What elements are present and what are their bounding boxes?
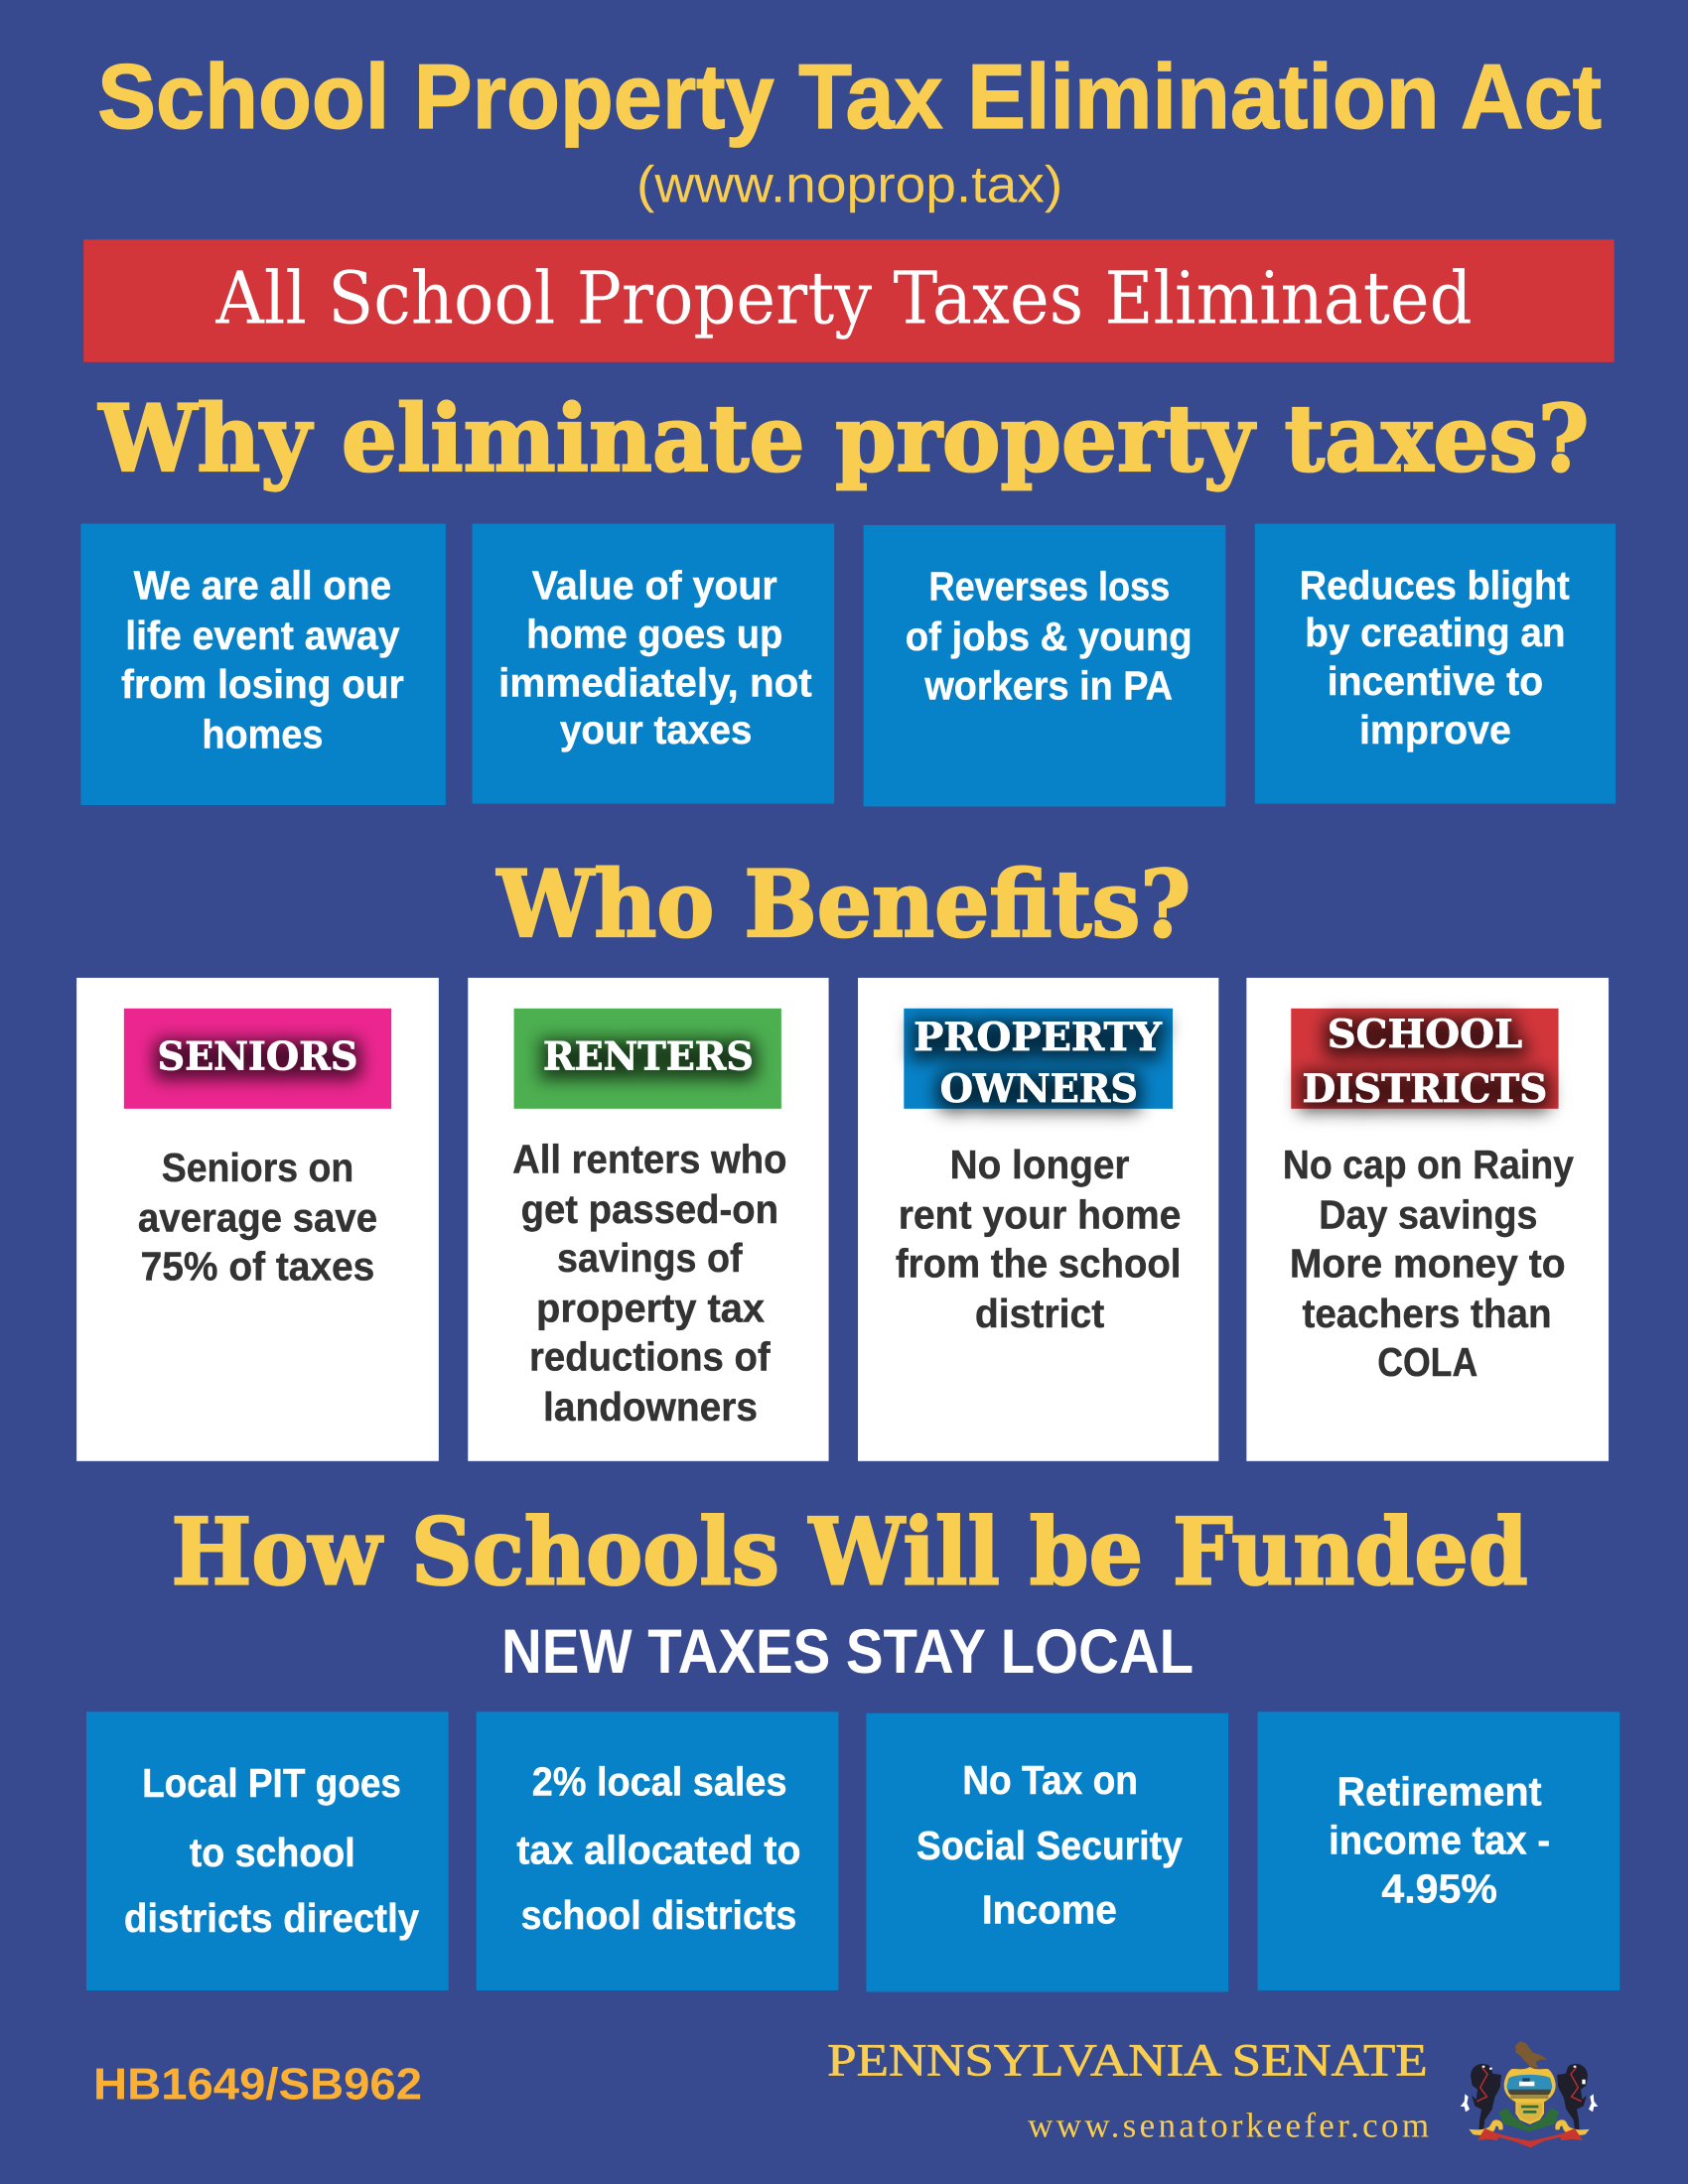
reason card 1: [80, 524, 446, 805]
text: seniors: 75% of taxes: [141, 1245, 374, 1290]
text: seniors: [138, 1147, 377, 1290]
funding card 2: tax allocated to: [516, 1829, 801, 1873]
horse white marks: [1461, 2066, 1598, 2112]
label: property owners: [904, 1009, 1173, 1112]
reason card 2: Value of your: [532, 564, 777, 609]
reason card 1: life event away: [125, 614, 400, 659]
text: renters: get passed-on: [521, 1188, 778, 1233]
reason card 1: We are all one: [134, 564, 391, 609]
heading: why eliminate: Why eliminate property taxes?: [97, 384, 1589, 493]
label: property owners: OWNERS: [940, 1065, 1138, 1112]
reason card 1: from losing our: [121, 663, 404, 708]
card: seniors: [76, 978, 439, 1461]
reason card 4: by creating an: [1305, 612, 1566, 656]
funding card 2: school districts: [521, 1894, 796, 1939]
text: school districts: Day savings: [1319, 1193, 1538, 1238]
title: School Property Tax Elimination Act: [97, 45, 1602, 148]
text: school districts: No cap on Rainy: [1283, 1144, 1574, 1188]
text: school districts: [1283, 1144, 1574, 1386]
icon: pennsylvania coat of arms: [1461, 2041, 1598, 2147]
funding card 3: No Tax on: [962, 1759, 1138, 1804]
panel: who benefits cards: [76, 978, 1609, 1461]
reason card 4: Reduces blight: [1300, 564, 1570, 609]
text: seniors: Seniors on: [162, 1147, 353, 1191]
text: school districts: COLA: [1377, 1341, 1477, 1386]
funding card 4: [1258, 1711, 1619, 1990]
reason card 2: home goes up: [526, 613, 782, 657]
text: school districts: More money to: [1290, 1243, 1566, 1287]
banner: all taxes eliminated: [83, 239, 1615, 362]
label: renters: [514, 1009, 781, 1109]
horses: [1471, 2064, 1588, 2130]
heading: how schools will be funded: How Schools Will be Funded: [172, 1497, 1528, 1606]
funding card 4: Retirement: [1337, 1770, 1542, 1815]
funding card 1: Local PIT goes: [142, 1762, 401, 1807]
senate website: www.senatorkeefer.com: [1028, 2108, 1430, 2145]
panel: funding sources: [86, 1711, 1619, 1991]
text: renters: savings of: [557, 1237, 743, 1282]
label: renters: RENTERS: [543, 1033, 754, 1079]
reason card 3: workers in PA: [923, 664, 1173, 709]
label: seniors: SENIORS: [157, 1033, 357, 1079]
senate name: PENNSYLVANIA SENATE: [827, 2036, 1428, 2087]
funding card 1: [86, 1711, 449, 1990]
heading: who benefits: Who Benefits?: [495, 850, 1191, 958]
reason card 4: improve: [1359, 709, 1511, 753]
wheat and olive branches: [1498, 2108, 1559, 2131]
text: property owners: No longer: [950, 1144, 1130, 1188]
label: school districts: SCHOOL: [1328, 1012, 1523, 1057]
funding card 4: 4.95%: [1381, 1868, 1497, 1912]
card: property owners: [858, 978, 1218, 1461]
yellow scrolls: [1469, 2119, 1503, 2135]
funding card 4: income tax -: [1329, 1819, 1550, 1863]
label: property owners: PROPERTY: [914, 1014, 1163, 1060]
reason card 2: immediately, not: [498, 661, 812, 706]
text: renters: reductions of: [529, 1336, 771, 1380]
website link: (www.noprop.tax): [636, 156, 1062, 213]
funding card 2: [477, 1711, 838, 1990]
label: school districts: DISTRICTS: [1302, 1065, 1547, 1112]
panel: why reasons: [80, 524, 1616, 806]
shield: [1504, 2067, 1556, 2103]
text: property owners: district: [975, 1293, 1105, 1337]
funding card 2: 2% local sales: [532, 1760, 786, 1805]
reason card 4: [1255, 524, 1616, 804]
text: renters: landowners: [543, 1386, 758, 1431]
label: seniors: [124, 1009, 391, 1109]
text: property owners: rent your home: [899, 1193, 1181, 1238]
reason card 3: Reverses loss: [929, 566, 1170, 611]
reason card 3: of jobs & young: [906, 615, 1193, 660]
subheading: new taxes stay local: NEW TAXES STAY LOCAL: [501, 1616, 1194, 1687]
eagle: [1515, 2041, 1547, 2068]
funding card 1: districts directly: [124, 1897, 419, 1942]
reason card 4: incentive to: [1328, 660, 1543, 705]
label: school districts: [1291, 1009, 1559, 1112]
reason card 2: [472, 524, 834, 804]
text: property owners: from the school: [896, 1243, 1181, 1287]
text: renters: property tax: [536, 1287, 765, 1331]
text: property owners: [896, 1144, 1181, 1337]
text: renters: [512, 1138, 786, 1431]
horse details: [1477, 2068, 1582, 2102]
banner: all taxes eliminated: All School Property Taxes Eliminated: [214, 258, 1473, 341]
text: renters: All renters who: [512, 1138, 786, 1182]
card: renters: [468, 978, 829, 1461]
reason card 2: your taxes: [560, 709, 752, 753]
funding card 3: Social Security: [916, 1825, 1183, 1869]
text: school districts: teachers than: [1302, 1293, 1552, 1337]
reason card 3: [864, 525, 1225, 806]
reason card 1: homes: [202, 713, 323, 757]
lower shield: [1516, 2102, 1543, 2123]
funding card 3: Income: [982, 1889, 1117, 1933]
card: school districts: [1246, 978, 1609, 1461]
bill numbers: HB1649/SB962: [93, 2059, 422, 2109]
text: seniors: average save: [138, 1196, 377, 1241]
funding card 1: to school: [190, 1832, 355, 1876]
ribbon: [1477, 2128, 1583, 2147]
funding card 3: [866, 1713, 1228, 1991]
